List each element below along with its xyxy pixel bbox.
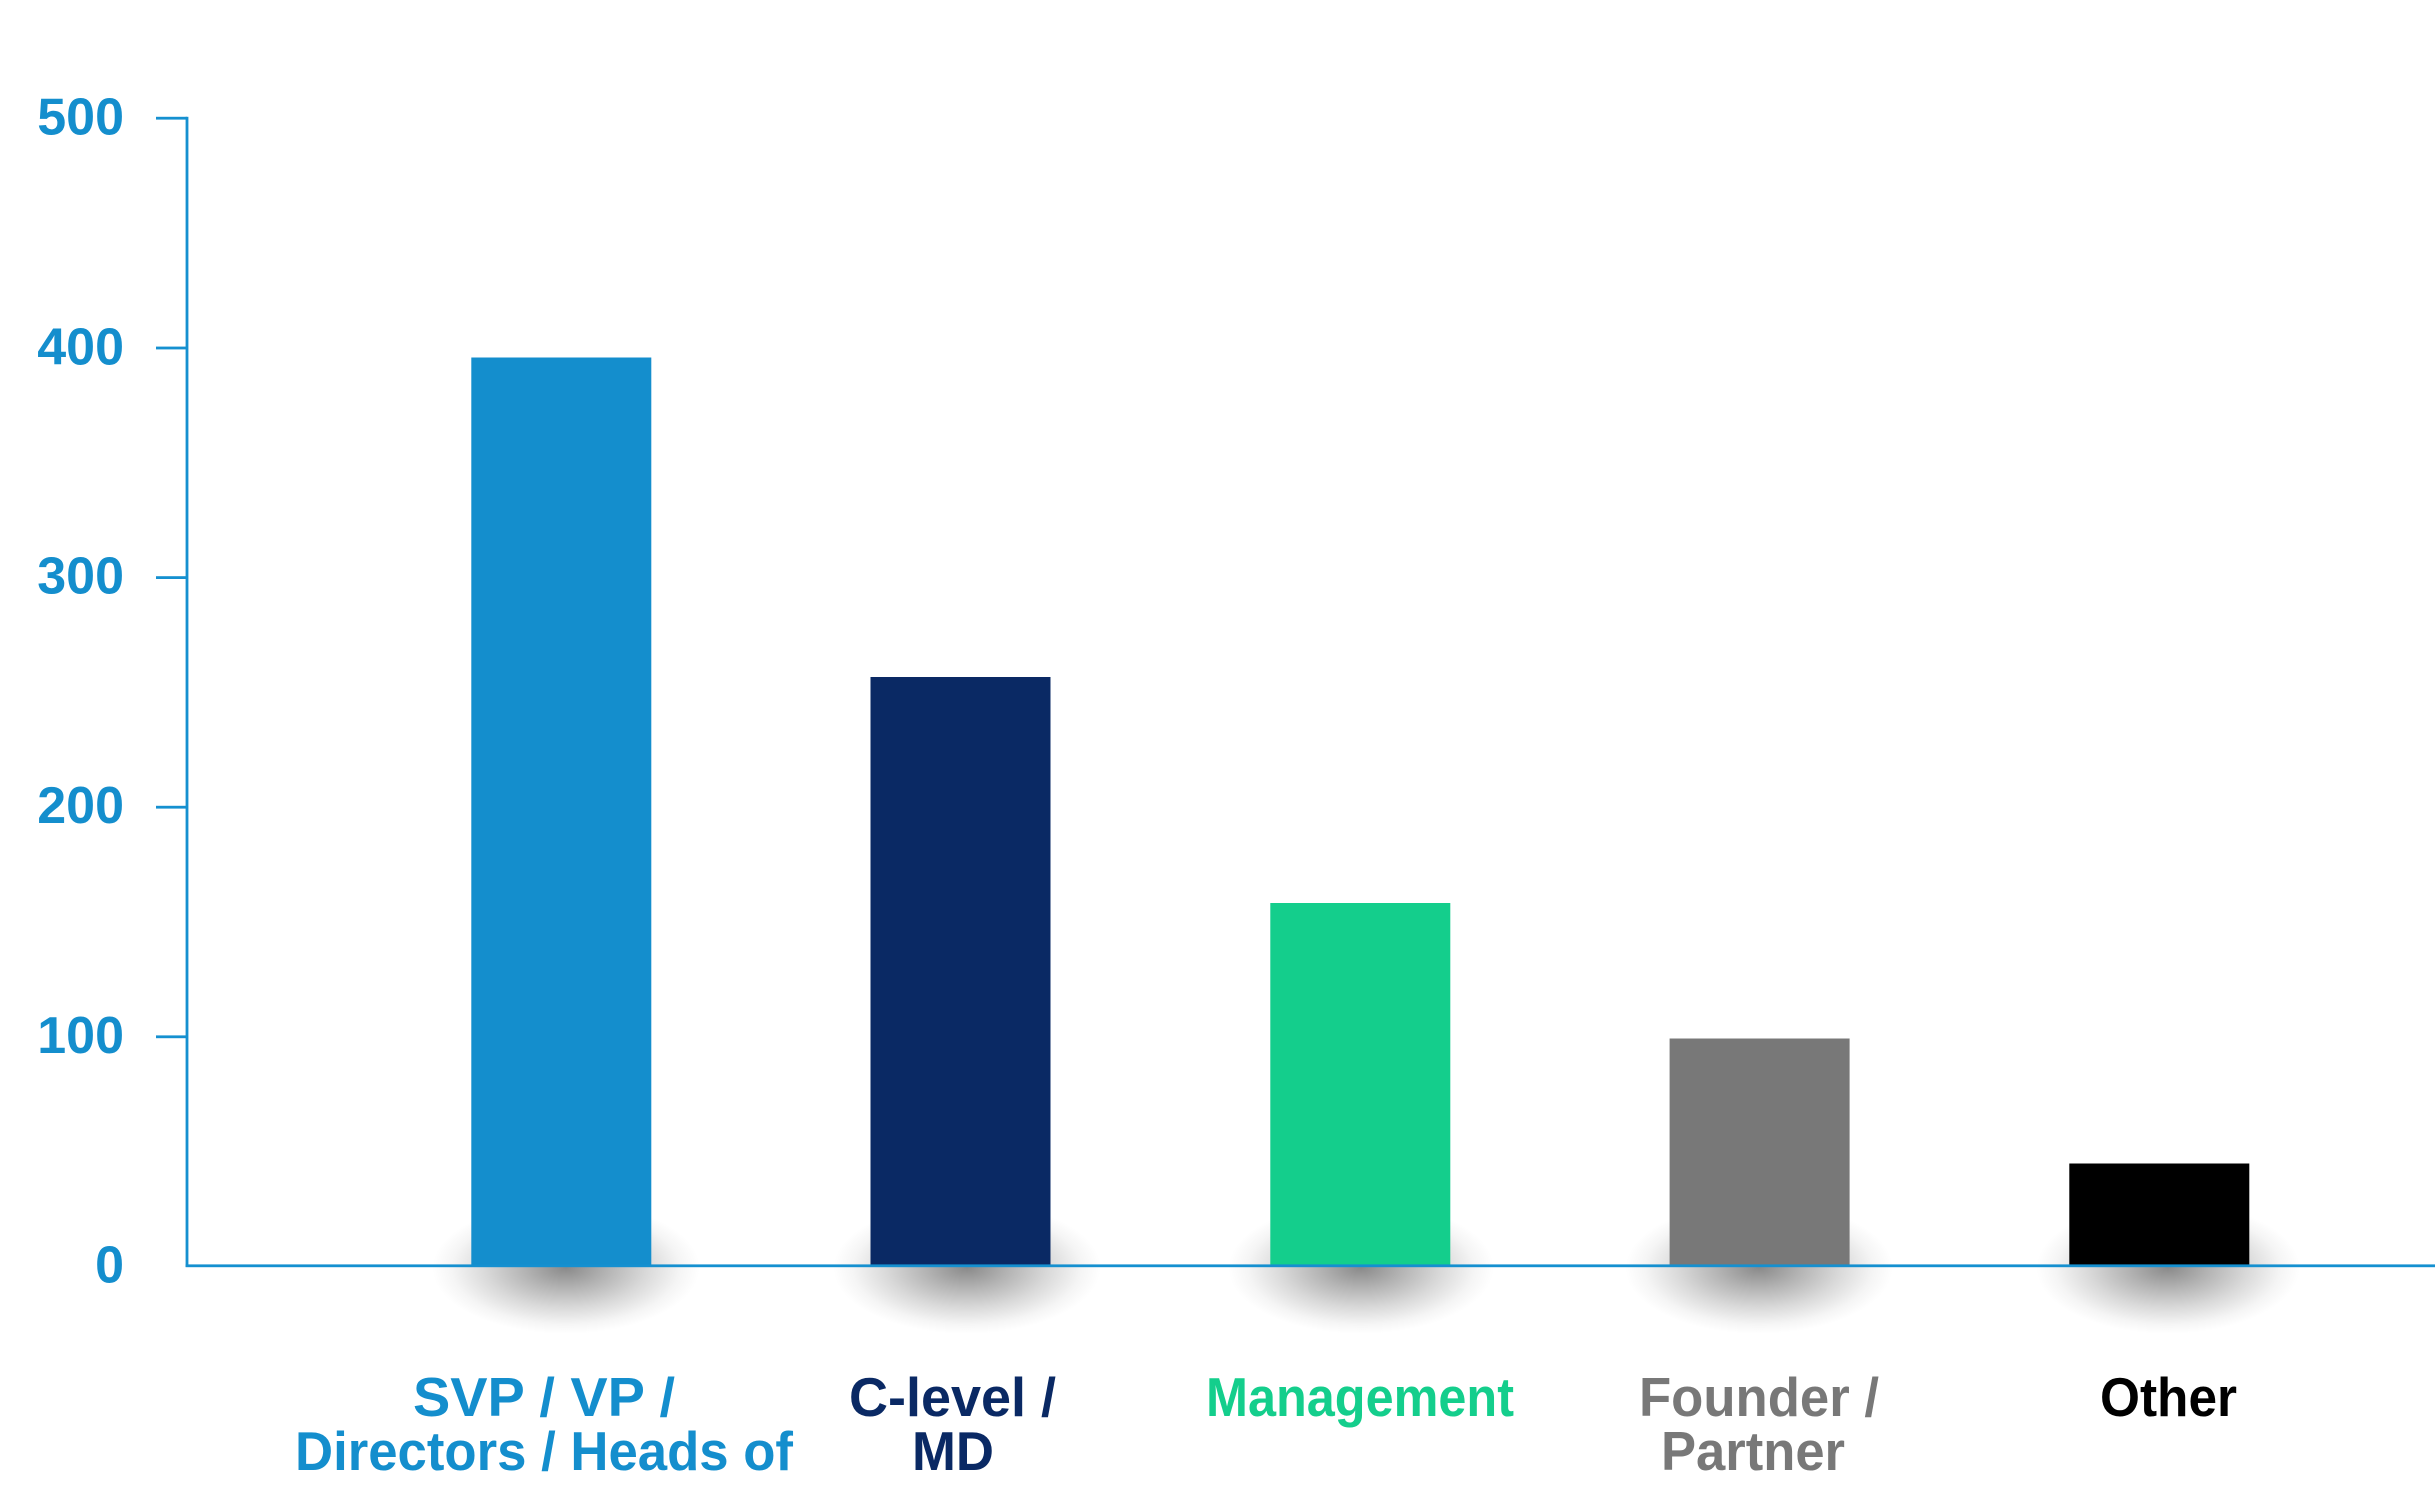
category label: C-level / MD: MD — [912, 1420, 994, 1482]
category label: Founder / Partner: Founder / — [1639, 1366, 1879, 1428]
bar: Management — [1270, 903, 1450, 1266]
y-axis labels: 100 — [37, 1007, 124, 1065]
category label: Founder / Partner: Partner — [1661, 1420, 1845, 1482]
bar: SVP / VP / Directors / Heads of — [471, 358, 651, 1266]
category label: Founder / Partner — [1639, 1366, 1879, 1482]
y-axis labels: 500 — [37, 88, 124, 146]
y-axis labels: 300 — [37, 548, 124, 606]
category label: Management: Management — [1206, 1366, 1514, 1428]
category label: SVP / VP / Directors / Heads of: Directors / Heads of — [295, 1420, 794, 1482]
axes and ticks — [156, 117, 2435, 1267]
category label: SVP / VP / Directors / Heads of: SVP / VP / — [413, 1366, 675, 1428]
bar: C-level / MD — [870, 677, 1050, 1266]
category label: C-level / MD — [849, 1366, 1056, 1482]
category label: Other: Other — [2100, 1366, 2237, 1428]
bar: Other — [2069, 1164, 2249, 1266]
y-axis labels: 0 — [95, 1236, 124, 1294]
bar shadows — [432, 1202, 2300, 1334]
y-axis labels: 400 — [37, 318, 124, 376]
bar: Founder / Partner — [1670, 1038, 1850, 1266]
y-axis labels: 200 — [37, 777, 124, 835]
y-axis labels — [37, 88, 124, 1294]
category label: SVP / VP / Directors / Heads of — [295, 1366, 794, 1482]
category label: C-level / MD: C-level / — [849, 1366, 1056, 1428]
